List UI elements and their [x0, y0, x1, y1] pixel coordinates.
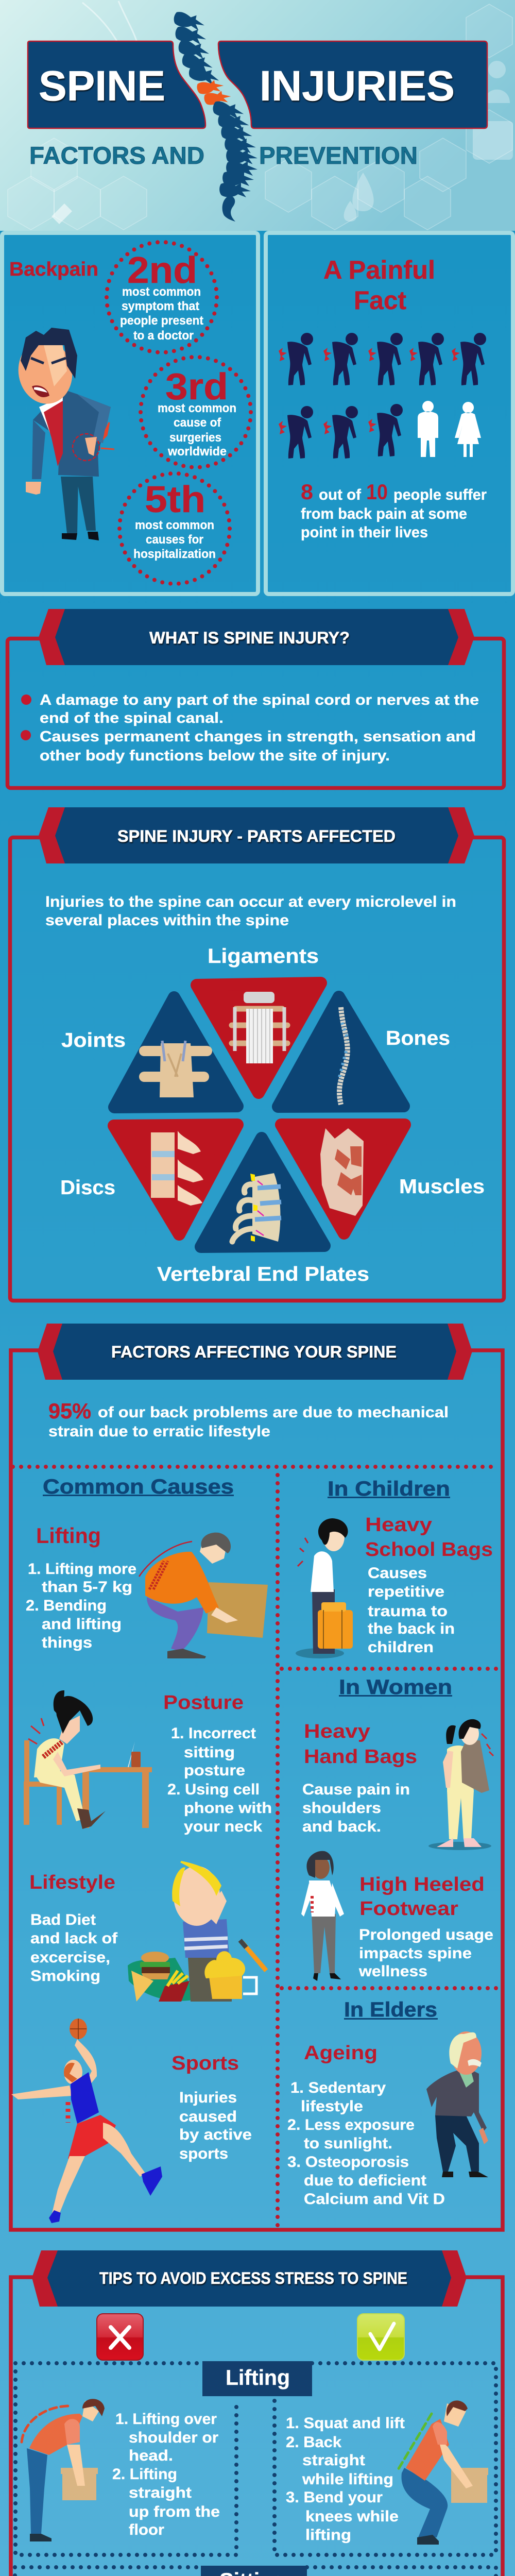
- banner: parts affected: SPINE INJURY - PARTS AFFECTED: [117, 827, 396, 845]
- icon: man lifting box: [139, 1533, 268, 1658]
- bullet 2: Causes permanent changes in strength, sensation and: [40, 728, 476, 745]
- callout: 3rd surgeries: [141, 357, 251, 467]
- triangle: muscles: [281, 1125, 405, 1233]
- cause: school bags text: repetitive: [368, 1583, 444, 1600]
- cause: ageing text: 1. Sedentary: [290, 2079, 386, 2096]
- panel: factors affecting your spine: [11, 1324, 503, 2230]
- cause: ageing text: 3. Osteoporosis: [287, 2154, 409, 2171]
- intro text: [45, 893, 456, 929]
- cause: school bags text: Causes: [368, 1565, 427, 1582]
- cause: hand bags text: [302, 1721, 417, 1835]
- text: wrong lifting: up from the: [129, 2503, 220, 2520]
- icon: red cross box: [97, 2314, 143, 2360]
- label: joints: Joints: [61, 1029, 126, 1052]
- text: 8 out of 10: 10: [366, 480, 388, 504]
- triangle: discs: [114, 1125, 237, 1234]
- text: 8 out of 10: point in their lives: [301, 524, 428, 541]
- icon row: 8 of 10 people with back pain: [279, 333, 486, 459]
- text: correct lifting: [286, 2415, 405, 2544]
- icon: elderly man: [426, 2031, 488, 2177]
- text: wrong lifting: [112, 2411, 220, 2538]
- text: 8 out of 10: people suffer: [393, 486, 487, 503]
- text: correct lifting: 1. Squat and lift: [286, 2415, 405, 2432]
- cause: high heeled footwear text: High Heeled: [359, 1874, 485, 1895]
- icon: spine column: [173, 11, 258, 222]
- title banner: [28, 41, 487, 169]
- banner: tips: [32, 2250, 467, 2307]
- heading: backpain: Backpain: [9, 259, 98, 280]
- text: correct lifting: 3. Bend your: [286, 2489, 383, 2506]
- callout: 3rd surgeries: surgeries: [169, 431, 221, 445]
- intro text: Injuries to the spine can occur at every microlevel in: [45, 893, 456, 910]
- panel: a painful fact: [266, 233, 513, 594]
- heading: a painful fact: Fact: [354, 286, 406, 315]
- cause: posture text: [163, 1692, 272, 1835]
- cause: sports text: by active: [179, 2126, 252, 2143]
- cause: hand bags text: Cause pain in: [302, 1781, 410, 1798]
- cause: sports text: caused: [179, 2108, 237, 2125]
- label: lifting: Lifting: [226, 2365, 290, 2389]
- cause: lifting text: things: [42, 1634, 92, 1651]
- cause: hand bags text: shoulders: [302, 1800, 381, 1817]
- panel: backpain statistics: [2, 233, 258, 594]
- text: wrong lifting: head.: [129, 2447, 173, 2464]
- cause: school bags text: children: [368, 1639, 434, 1656]
- tip box: lifting: [15, 2361, 496, 2555]
- cause: high heeled footwear text: Footwear: [359, 1898, 458, 1920]
- triangle: ligaments: [197, 983, 321, 1093]
- text: wrong lifting: shoulder or: [129, 2429, 218, 2446]
- heading: in elders: In Elders: [344, 1998, 437, 2021]
- text: correct lifting: knees while: [305, 2508, 399, 2525]
- text: wrong lifting: straight: [129, 2484, 192, 2501]
- banner: factors: FACTORS AFFECTING YOUR SPINE: [111, 1343, 397, 1361]
- text: correct lifting: lifting: [305, 2527, 351, 2544]
- cause: posture text: Posture: [163, 1692, 244, 1714]
- label: ligaments: Ligaments: [208, 945, 319, 968]
- text: correct lifting: 2. Back: [286, 2434, 341, 2451]
- cause: ageing text: to sunlight.: [304, 2135, 392, 2152]
- cause: posture text: 2. Using cell: [167, 1781, 260, 1798]
- cause: ageing text: lifestyle: [301, 2098, 363, 2115]
- callout: 2nd symptom: 2nd: [127, 250, 197, 291]
- cause: lifting text: 1. Lifting more: [28, 1561, 136, 1578]
- cause: lifting text: Lifting: [36, 1523, 101, 1548]
- bullet 1: [21, 692, 479, 726]
- word SPINE: SPINE: [39, 62, 165, 110]
- callout: 5th hospitalization: [119, 473, 230, 584]
- cause: lifestyle text: excercise,: [30, 1949, 110, 1966]
- banner: what is spine injury: WHAT IS SPINE INJURY?: [149, 629, 350, 647]
- banner: parts affected: [39, 807, 474, 863]
- cause: posture text: posture: [184, 1762, 245, 1779]
- cause: lifting text: 2. Bending: [26, 1597, 107, 1614]
- cause: posture text: your neck: [184, 1818, 262, 1835]
- triangle: joints: [114, 997, 237, 1107]
- callout: 3rd surgeries: most common: [158, 401, 236, 415]
- heading: a painful fact: A Painful: [323, 256, 435, 284]
- heading: in women: In Women: [339, 1676, 452, 1699]
- triangle: vertebral end plates: [201, 1138, 324, 1247]
- cause: lifestyle text: [29, 1872, 118, 1985]
- stat: 95 percent: of our back problems are due to mechanical: [98, 1404, 449, 1421]
- tip box: sitting: [15, 2566, 496, 2576]
- cause: ageing text: [287, 2042, 445, 2208]
- banner: factors: [38, 1324, 472, 1380]
- cause: school bags text: Heavy: [365, 1514, 432, 1536]
- cause: hand bags text: Heavy: [304, 1721, 370, 1742]
- icon: wrong lifting posture: [22, 2399, 105, 2541]
- icon: woman in high heels: [301, 1851, 344, 1981]
- cause: posture text: sitting: [184, 1744, 235, 1761]
- callout: 3rd surgeries: 3rd: [165, 366, 228, 408]
- bullet 2: other body functions below the site of injury.: [40, 748, 390, 764]
- cause: lifestyle text: Bad Diet: [30, 1911, 96, 1928]
- callout: 5th hospitalization: causes for: [146, 533, 203, 547]
- label: lifting: [202, 2361, 312, 2396]
- cause: sports text: Sports: [171, 2053, 239, 2074]
- text: wrong lifting: 1. Lifting over: [115, 2411, 217, 2428]
- banner: what is spine injury: [39, 609, 474, 665]
- cause: sports text: [171, 2053, 252, 2162]
- triangle: bones: [278, 997, 404, 1107]
- cause: school bags text: the back in: [368, 1620, 455, 1637]
- cause: lifestyle text: Smoking: [30, 1968, 100, 1985]
- callout: 3rd surgeries: cause of: [174, 416, 221, 430]
- cause: lifestyle text: Lifestyle: [29, 1872, 115, 1893]
- text: wrong lifting: floor: [129, 2521, 164, 2538]
- heading: in children: In Children: [328, 1478, 450, 1500]
- cause: sports text: sports: [179, 2145, 228, 2162]
- label: sitting: [201, 2566, 307, 2576]
- cause: lifting text: than 5-7 kg: [42, 1579, 132, 1596]
- icon: green check box: [357, 2314, 404, 2360]
- cause: school bags text: trauma to: [368, 1603, 448, 1620]
- cause: lifting text: [26, 1523, 136, 1651]
- word INJURIES: INJURIES: [260, 62, 455, 110]
- subtitle left: FACTORS AND: [29, 142, 204, 169]
- title box left: [28, 41, 205, 128]
- callout: 5th hospitalization: hospitalization: [133, 547, 216, 561]
- cause: lifestyle text: and lack of: [30, 1930, 118, 1947]
- cause: hand bags text: Hand Bags: [304, 1746, 417, 1768]
- panel: parts affected: [10, 807, 504, 1300]
- heading: a painful fact: [323, 256, 435, 315]
- intro text: several places within the spine: [45, 912, 289, 929]
- label: vertebral end plates: Vertebral End Plates: [157, 1263, 369, 1285]
- text: 8 out of 10: from back pain at some: [301, 505, 467, 522]
- text: 8 out of 10: out of: [319, 486, 362, 503]
- woman with posture problem: [24, 1690, 152, 1829]
- callout: 3rd surgeries: worldwide: [167, 445, 227, 459]
- heading: common causes: Common Causes: [43, 1476, 234, 1498]
- cause: ageing text: due to deficient: [304, 2172, 426, 2189]
- cause: high heeled footwear text: Prolonged usage: [359, 1926, 493, 1943]
- panel: what is spine injury: [7, 609, 504, 788]
- banner: tips: TIPS TO AVOID EXCESS STRESS TO SPINE: [99, 2269, 407, 2287]
- icon: basketball player: [11, 2019, 162, 2223]
- label: bones: Bones: [386, 1027, 450, 1049]
- callout: 5th hospitalization: most common: [135, 518, 214, 532]
- callout: 2nd symptom: [107, 242, 217, 352]
- stat: 95 percent: strain due to erratic lifestyle: [48, 1423, 270, 1440]
- cause: posture text: phone with: [184, 1800, 272, 1817]
- cause: school bags text: School Bags: [365, 1539, 493, 1561]
- text: wrong lifting: 2. Lifting: [112, 2466, 177, 2483]
- label: muscles: Muscles: [399, 1176, 485, 1198]
- callout: 2nd symptom: most common: [122, 285, 201, 299]
- label: discs: Discs: [60, 1177, 115, 1199]
- text: 8 out of 10: 8: [301, 480, 313, 504]
- cause: lifting text: and lifting: [42, 1616, 122, 1633]
- cause: posture text: 1. Incorrect: [171, 1725, 256, 1742]
- stat: 95 percent: [48, 1399, 449, 1440]
- cause: high heeled footwear text: impacts spine: [359, 1945, 472, 1962]
- bullet 1: end of the spinal canal.: [40, 710, 224, 726]
- bullet 1: A damage to any part of the spinal cord or nerves at the: [40, 692, 479, 708]
- title box right: [218, 41, 487, 128]
- text: correct lifting: straight: [302, 2452, 365, 2469]
- callout: 2nd symptom: people present: [120, 314, 203, 328]
- cause: hand bags text: and back.: [302, 1818, 381, 1835]
- subtitle right: PREVENTION: [259, 142, 418, 169]
- bullet 2: [21, 728, 476, 764]
- cause: ageing text: 2. Less exposure: [287, 2116, 415, 2133]
- header background: [0, 0, 515, 231]
- cause: high heeled footwear text: wellness: [358, 1963, 427, 1980]
- callout: 2nd symptom: symptom that: [122, 299, 199, 313]
- cause: school bags text: [365, 1514, 493, 1656]
- icon: junk food and smoking man: [128, 1861, 266, 2002]
- text: 8 out of 10: [301, 480, 487, 541]
- cause: high heeled footwear text: [358, 1874, 493, 1980]
- callout: 2nd symptom: to a doctor: [133, 329, 194, 343]
- panel: tips to avoid stress: [11, 2250, 503, 2576]
- stat: 95 percent: 95%: [48, 1399, 91, 1423]
- icon: correct lifting posture: [398, 2400, 488, 2545]
- text: correct lifting: while lifting: [302, 2471, 393, 2488]
- icon: boy with school bag: [296, 1518, 353, 1658]
- callout: 5th hospitalization: 5th: [145, 479, 205, 520]
- icon: man with back pain: [13, 328, 114, 540]
- cause: ageing text: Calcium and Vit D: [304, 2191, 445, 2208]
- icon: woman with hand bag: [428, 1719, 493, 1850]
- cause: ageing text: Ageing: [304, 2042, 377, 2064]
- cause: sports text: Injuries: [179, 2089, 237, 2106]
